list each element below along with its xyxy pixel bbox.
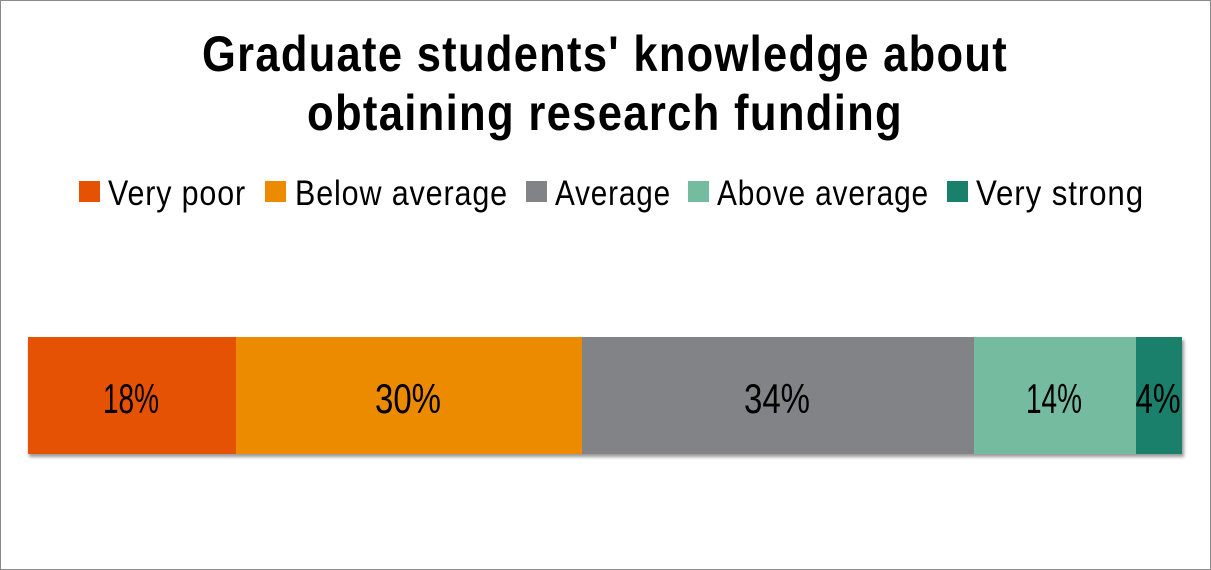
segment: very strong 4% <box>1136 337 1182 454</box>
segment: very strong 4%: 4% <box>1136 375 1180 422</box>
segment: below average 30%: 30% <box>375 375 441 422</box>
segment: very poor 18%: 18% <box>103 375 159 422</box>
legend item: average: Average <box>555 174 671 213</box>
title: Graduate students' knowledge about <box>202 26 1008 82</box>
legend <box>79 174 1144 213</box>
segment: below average 30% <box>236 337 582 454</box>
stacked bar chart <box>28 337 1184 457</box>
segment: above average 14% <box>974 337 1136 454</box>
segment: above average 14%: 14% <box>1026 375 1082 422</box>
segment: very poor 18% <box>28 337 236 454</box>
legend item: above average: Above average <box>717 174 929 213</box>
legend item: average <box>526 174 671 213</box>
legend item: very strong: Very strong <box>976 174 1144 213</box>
segment: average 34%: 34% <box>744 375 810 422</box>
legend item: very poor: Very poor <box>108 174 246 213</box>
title <box>202 26 1008 141</box>
title: obtaining research funding <box>307 85 903 141</box>
legend item: below average: Below average <box>295 174 508 213</box>
segment: average 34% <box>582 337 974 454</box>
